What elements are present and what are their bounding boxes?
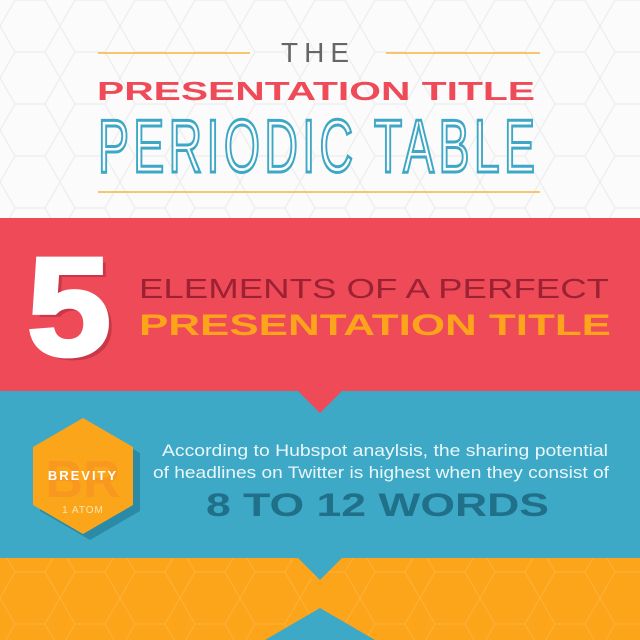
blue panel: brevity: of headlines on Twitter is highest when they consist of: [153, 464, 609, 482]
header background: [0, 0, 640, 218]
icon: hexagon brevity: BR: [45, 451, 121, 509]
header title: [97, 37, 540, 192]
big number 5: 5: [32, 232, 116, 389]
icon: hexagon brevity: BREVITY: [48, 468, 118, 483]
icon: hexagon brevity: 1 ATOM: [62, 505, 104, 516]
red banner: [0, 218, 640, 391]
big number 5: 5: [27, 228, 111, 385]
orange panel: [0, 557, 640, 640]
body text: According to Hubspot anaylsis, the sharing potential: [162, 442, 608, 460]
highlight: 8 to 12 words: 8 TO 12 WORDS: [206, 487, 549, 523]
header title: PERIODIC TABLE: [98, 106, 535, 189]
red banner: ELEMENTS OF A PERFECT: [139, 273, 609, 304]
header title: THE: [281, 37, 355, 68]
red banner: PRESENTATION TITLE: [139, 309, 611, 342]
icon: hexagon brevity: [33, 418, 140, 540]
header title: PRESENTATION TITLE: [97, 76, 535, 106]
blue panel: brevity: [0, 390, 640, 558]
